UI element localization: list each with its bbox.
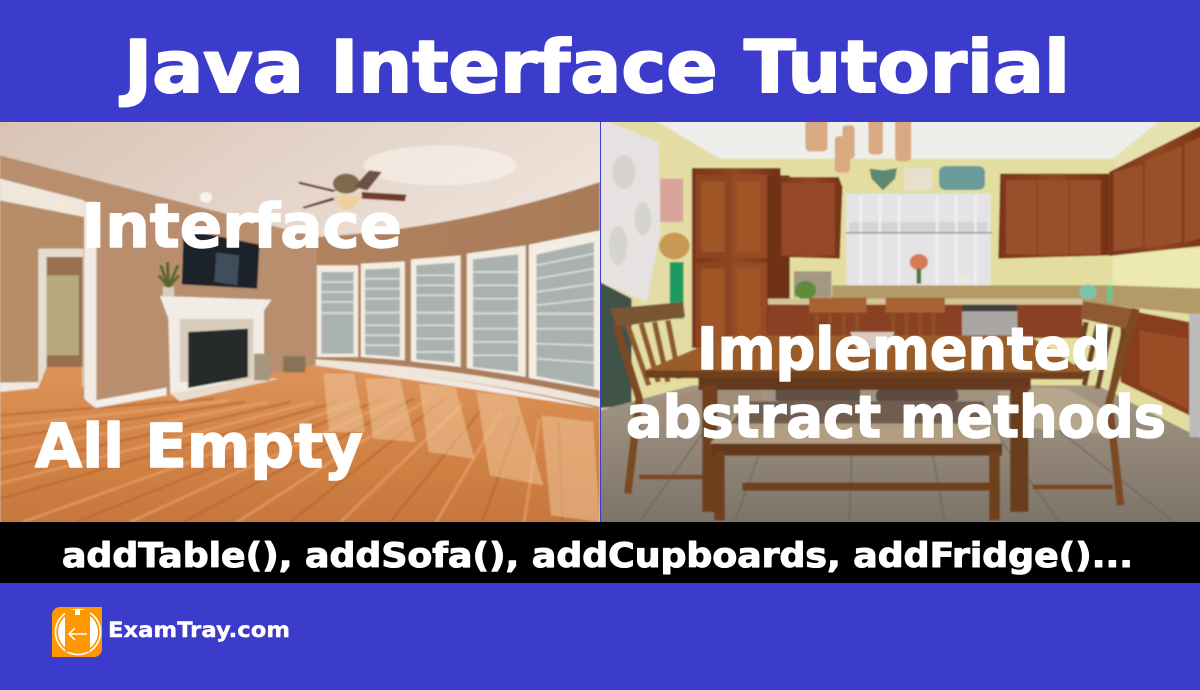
window (846, 194, 991, 286)
backsplash (832, 285, 1200, 316)
curtain (593, 115, 660, 302)
tall cabinet (692, 168, 781, 348)
label: All Empty: All Empty (35, 411, 363, 482)
bench (710, 401, 1002, 444)
flowers (910, 254, 928, 270)
footer band (0, 583, 1200, 690)
panel: furnished kitchen photo (593, 115, 1200, 529)
label: Implemented abstract methods: abstract methods (626, 383, 1166, 451)
plant (163, 287, 174, 296)
base cabinets (768, 305, 962, 338)
back chairs (809, 298, 867, 313)
label: Implemented abstract methods (626, 315, 1166, 451)
upper cabinets (780, 177, 842, 259)
left chair (611, 302, 685, 327)
title: Java Interface Tutorial (119, 25, 1070, 109)
label: Implemented abstract methods: Implemented (697, 315, 1111, 383)
pendant lights (805, 115, 911, 173)
table (645, 335, 1085, 372)
lantern and basket (254, 354, 270, 380)
methods list text: addTable(), addSofa(), addCupboards, addFridge()... (62, 536, 1133, 576)
panel: empty living room photo (0, 115, 608, 529)
wall signs (870, 168, 897, 190)
icon: ExamTray logo (52, 607, 102, 657)
header band (0, 0, 1200, 122)
right chair (1080, 301, 1140, 330)
tv (182, 229, 259, 289)
label: Interface: Interface (82, 191, 402, 262)
ceiling fan (333, 174, 360, 194)
windows (317, 230, 600, 390)
code methods strip (0, 522, 1200, 583)
floor (593, 385, 1200, 529)
fireplace (160, 296, 272, 394)
panel divider line (600, 122, 601, 522)
brand name: ExamTray.com (108, 618, 290, 642)
